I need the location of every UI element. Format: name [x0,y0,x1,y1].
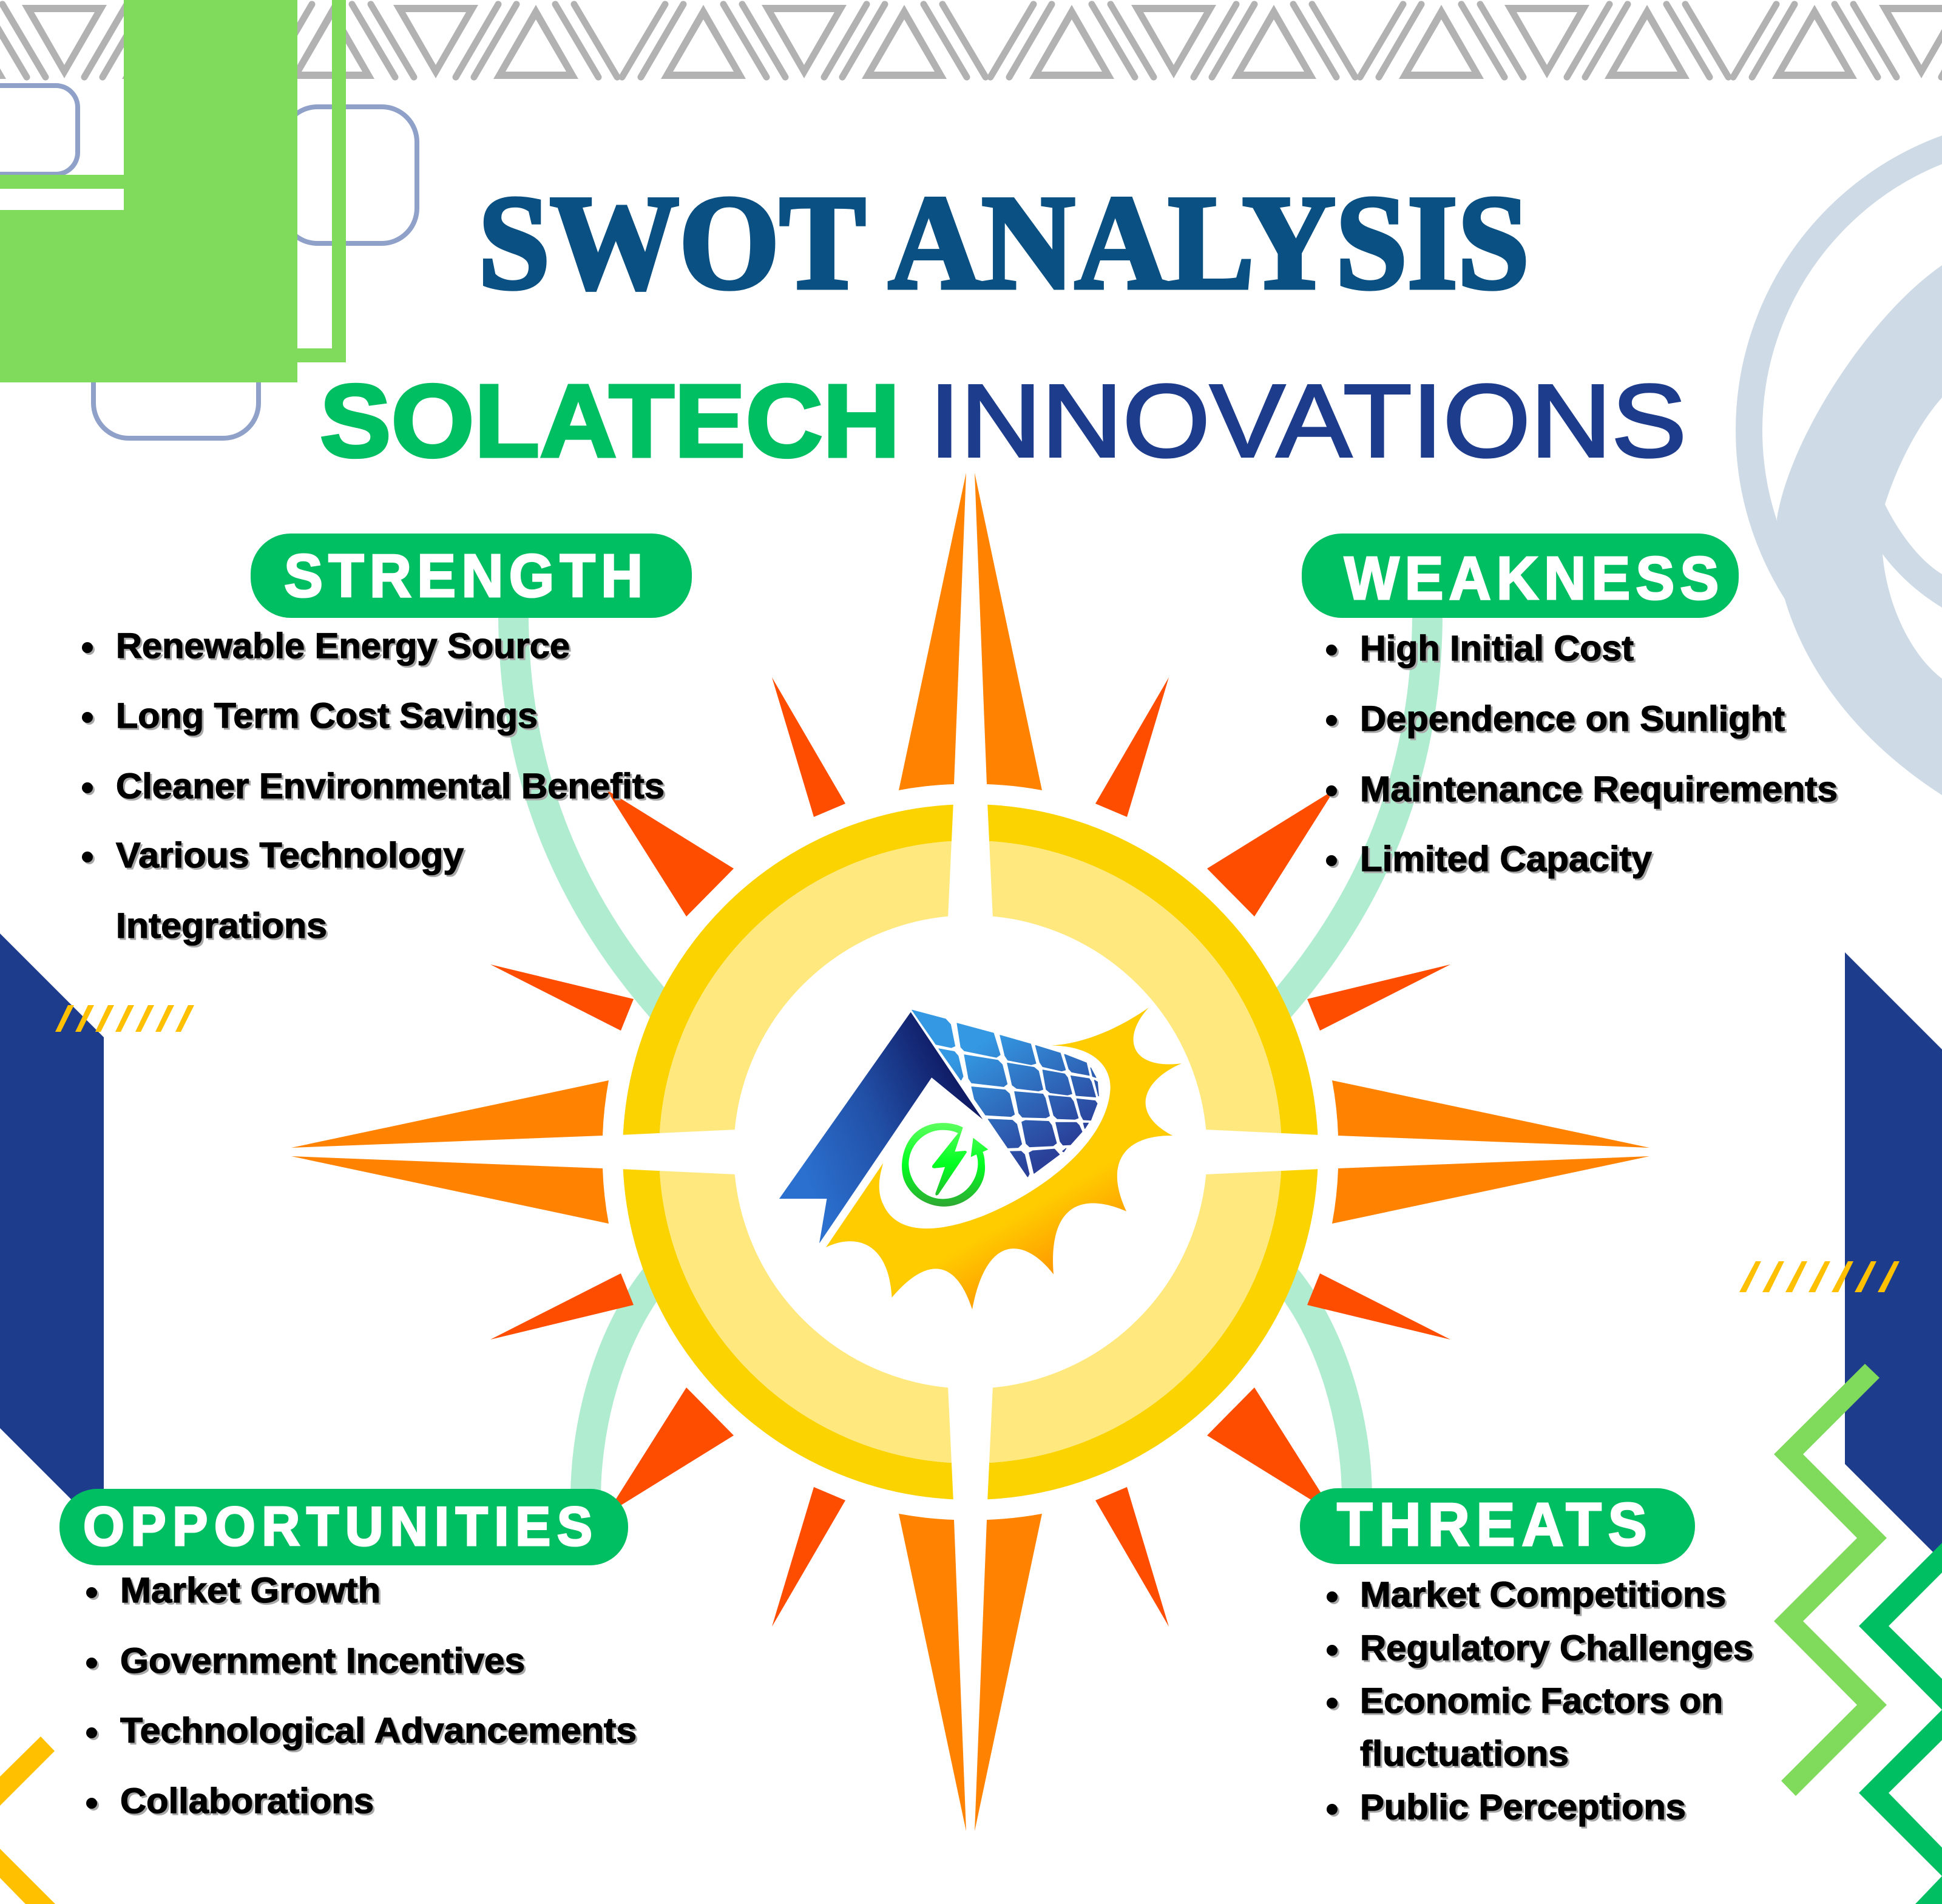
weakness heading pill [1302,534,1739,618]
decorative outlined rounded squares [0,86,417,438]
subtitle: company name, green part: SOLATECH [320,364,900,479]
logo: roof [779,1012,983,1244]
threats list: Public Perceptions [1360,1787,1686,1827]
panel: threats [1300,1488,1753,1827]
opportunities list: Market Growth [120,1571,381,1610]
strength list: Cleaner Environmental Benefits [116,767,665,806]
strength list: Integrations [116,906,327,946]
threats list: Market Competitions [1360,1575,1726,1614]
yellow chevrons, bottom left [0,1736,55,1904]
opportunities list [86,1571,637,1821]
threats list: Economic Factors on [1360,1681,1723,1721]
strength list: Renewable Energy Source [116,626,570,666]
top-left green block decoration [0,0,346,382]
subtitle: company name, navy part: INNOVATIONS [929,364,1687,479]
pale blue circle decoration, right edge [1749,130,1942,795]
threats list: fluctuations [1360,1734,1569,1774]
strength heading pill: STRENGTH [284,541,643,609]
threats list [1327,1575,1753,1827]
subtitle [320,364,1687,479]
weakness list [1326,629,1838,879]
weakness list: High Initial Cost [1360,629,1634,668]
logo: green energy ring and bolt [902,1123,988,1207]
strength list: Various Technology [116,836,464,875]
sun ring [594,776,1347,1528]
top triangle pattern band [0,4,1942,79]
logo: sun crown [826,1008,1182,1309]
central logo: solar roof with sun [779,1008,1182,1309]
light green zigzag, bottom right [1774,1364,1887,1796]
weakness heading pill: WEAKNESS [1344,544,1719,612]
navy side panel, right [1845,952,1942,1561]
yellow hatch marks, left [55,1005,194,1032]
yellow hatch marks, right [1739,1261,1900,1292]
mint connector arcs behind the sun [513,613,1427,1499]
opportunities list: Technological Advancements [120,1711,637,1750]
strength heading pill [251,534,692,618]
sun rays [291,473,1649,1831]
dark green zigzag, bottom right [1859,1543,1942,1904]
opportunities heading pill: OPPORTUNITIES [83,1495,592,1557]
weakness list: Maintenance Requirements [1360,770,1838,809]
panel: weakness [1302,534,1838,879]
opportunities list: Collaborations [120,1781,374,1821]
panel: strength [82,534,692,946]
opportunities list: Government Incentives [120,1641,525,1681]
panel: opportunities [59,1489,637,1821]
strength list: Long Term Cost Savings [116,696,538,736]
weakness list: Dependence on Sunlight [1360,699,1785,739]
weakness list: Limited Capacity [1360,839,1652,879]
strength list [82,626,665,946]
title: SWOT ANALYSIS [478,168,1529,317]
threats list: Regulatory Challenges [1360,1628,1753,1668]
threats heading pill: THREATS [1337,1490,1647,1558]
navy side panel, left [0,933,104,1532]
logo: solar panel cells [912,1010,1098,1177]
